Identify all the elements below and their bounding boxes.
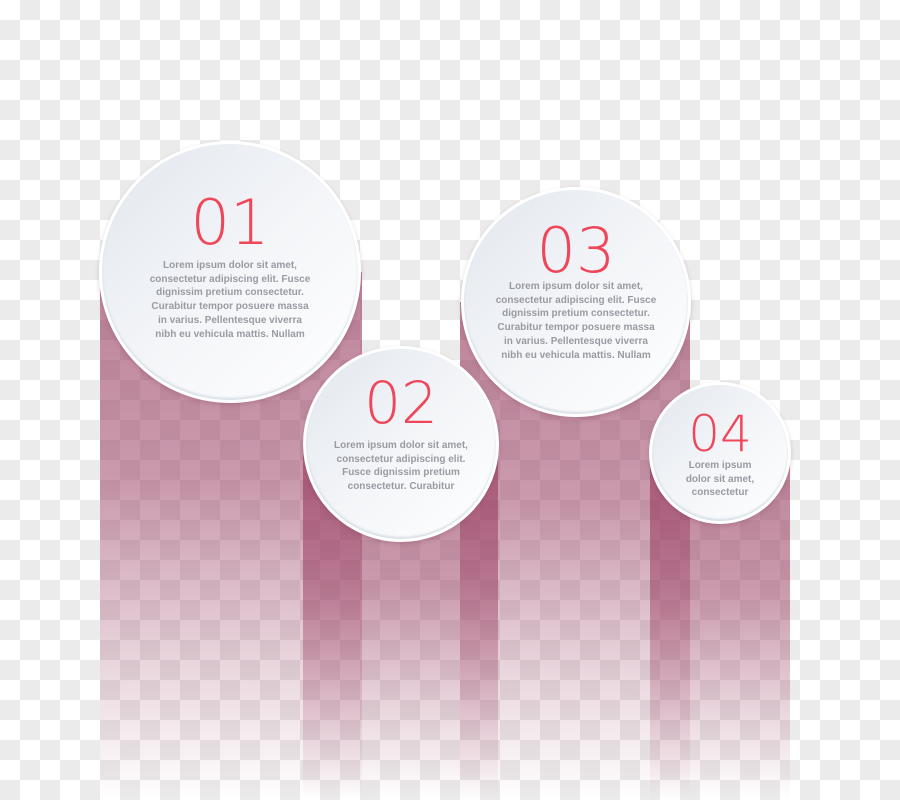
bar 3 — [460, 302, 690, 800]
text 04: dolor sit amet, — [686, 474, 754, 485]
number 03: 03 — [537, 214, 615, 287]
bar 1 — [100, 272, 362, 800]
text 03: Lorem ipsum dolor sit amet, — [509, 281, 643, 292]
text 03: consectetur adipiscing elit. Fusce — [496, 295, 656, 306]
text 02: consectetur. Curabitur — [348, 481, 454, 492]
text 01 — [150, 260, 310, 340]
number 04: 04 — [688, 405, 752, 463]
circle 04 — [649, 382, 791, 524]
bar 4 — [650, 453, 790, 800]
text 03: Curabitur tempor posuere massa — [497, 322, 655, 333]
text 01: consectetur adipiscing elit. Fusce — [150, 274, 310, 285]
text 02: consectetur adipiscing elit. — [337, 454, 465, 465]
number 02: 02 — [364, 369, 438, 437]
text 04: consectetur — [692, 487, 748, 498]
text 04 — [686, 460, 754, 498]
text 01: dignissim pretium consectetur. — [156, 287, 304, 298]
text 01: Lorem ipsum dolor sit amet, — [163, 260, 297, 271]
text 02: Lorem ipsum dolor sit amet, — [334, 440, 468, 451]
number 01: 01 — [191, 186, 269, 259]
text 02 — [334, 440, 468, 492]
text 01: nibh eu vehicula mattis. Nullam — [155, 329, 305, 340]
text 03: in varius. Pellentesque viverra — [504, 336, 648, 347]
text 03 — [496, 281, 656, 361]
text 02: Fusce dignissim pretium — [342, 467, 460, 478]
text 03: nibh eu vehicula mattis. Nullam — [501, 350, 651, 361]
circle 01 — [99, 141, 361, 403]
circle 03 — [461, 187, 691, 417]
text 03: dignissim pretium consectetur. — [502, 308, 650, 319]
bar 2 — [303, 443, 498, 800]
circle 02 — [303, 346, 499, 542]
text 04: Lorem ipsum — [689, 460, 751, 471]
text 01: in varius. Pellentesque viverra — [158, 315, 302, 326]
text 01: Curabitur tempor posuere massa — [151, 301, 309, 312]
